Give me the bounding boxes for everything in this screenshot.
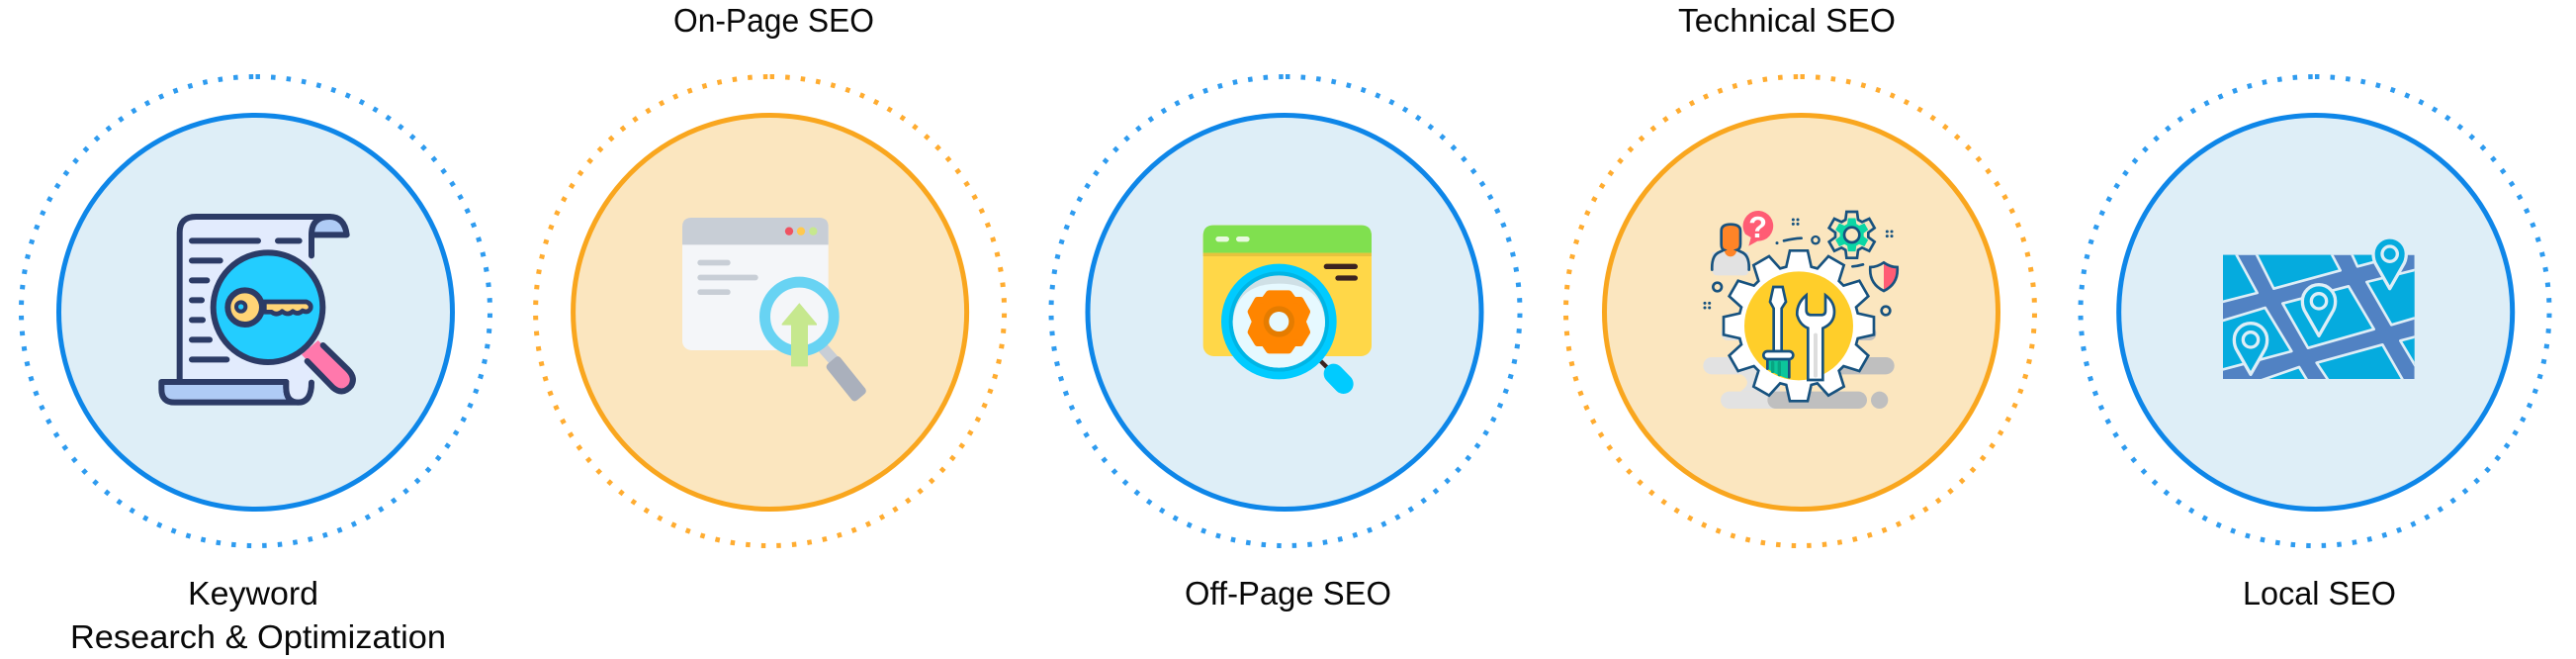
orange disc: [1604, 115, 1998, 509]
icon: document with key under magnifier: [161, 217, 353, 403]
icon: browser window with magnifier and up arrow: [682, 218, 866, 401]
blue disc: [59, 115, 453, 509]
panel: On-Page SEO: [536, 2, 1005, 546]
icon: gear with tools, person, small gear and shield: ?: [1748, 211, 1767, 244]
label: Keyword: [188, 575, 318, 612]
blue disc: [2119, 115, 2513, 509]
label: Local SEO: [2243, 575, 2396, 612]
label: Technical SEO: [1678, 2, 1896, 39]
dotted ring: [536, 77, 1005, 546]
orange disc: [574, 115, 967, 509]
label: [70, 575, 446, 655]
icon: city map with location pins: [2218, 237, 2420, 386]
panel: Technical SEO: [1566, 2, 2035, 546]
panel: Local SEO: [2081, 77, 2549, 612]
label: Research & Optimization: [70, 618, 446, 655]
blue disc: [1088, 115, 1481, 509]
panel: Keyword Research & Optimization: [22, 77, 490, 655]
dotted ring: [1051, 77, 1520, 546]
dotted ring: [1566, 77, 2035, 546]
icon: gear with tools, person, small gear and shield: [1703, 211, 1898, 409]
dotted ring: [2081, 77, 2549, 546]
label: Off-Page SEO: [1185, 575, 1391, 612]
dotted ring: [22, 77, 490, 546]
panel: Off-Page SEO: [1051, 77, 1520, 612]
label: On-Page SEO: [673, 2, 874, 39]
icon: window with gear under magnifier: [1203, 226, 1372, 384]
